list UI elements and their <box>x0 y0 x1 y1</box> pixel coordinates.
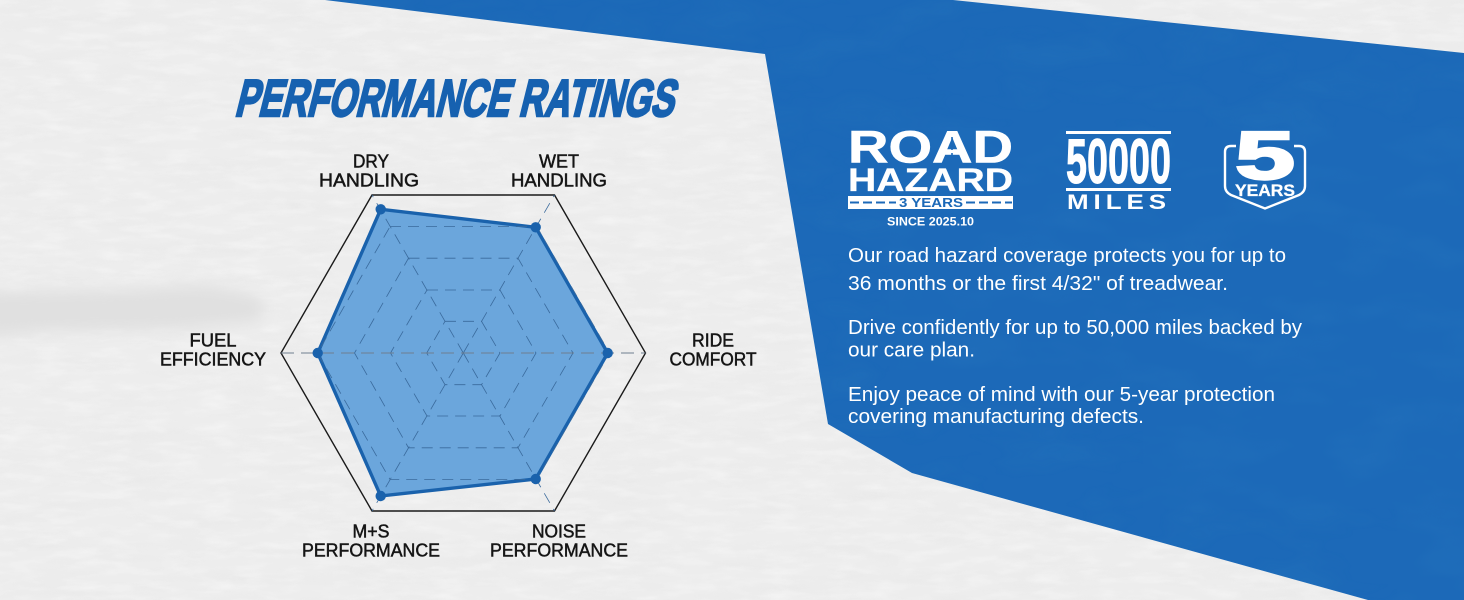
label: m+s performance: M+S <box>352 520 390 542</box>
icon: road hazard badge: HAZARD <box>848 162 1013 198</box>
data points <box>312 204 613 501</box>
label: m+s performance <box>302 520 440 560</box>
icon: 50000 miles badge: 50000 <box>1066 127 1171 197</box>
icon: 50000 miles badge <box>1066 127 1171 214</box>
label: noise performance: PERFORMANCE <box>490 540 628 560</box>
paragraph: road hazard: 36 months or the first 4/32" of treadwear. <box>848 273 1228 295</box>
icon: 5 years shield: YEARS <box>1235 182 1295 200</box>
icon: road hazard badge: 3 YEARS <box>899 195 963 210</box>
data area <box>318 209 608 496</box>
icon: road hazard badge: ROAD <box>848 122 1013 172</box>
label: m+s performance: PERFORMANCE <box>302 540 440 560</box>
icon: 5 years shield <box>1225 118 1305 208</box>
label: dry handling: DRY <box>353 150 389 172</box>
paragraph: five year protection: Enjoy peace of mind with our 5-year protection <box>848 384 1275 406</box>
paragraph: mileage: Drive confidently for up to 50,000 miles backed by <box>848 317 1302 339</box>
label: ride comfort: RIDE <box>692 330 734 350</box>
title: PERFORMANCE RATINGS <box>231 70 685 128</box>
paragraph: mileage <box>848 317 1302 362</box>
paragraph: mileage: our care plan. <box>848 340 975 362</box>
paragraph: road hazard: Our road hazard coverage protects you for up to <box>848 245 1286 267</box>
panel: blue warranty background <box>325 0 1464 600</box>
icon: road hazard badge <box>848 122 1013 228</box>
horizontal axis <box>281 352 646 354</box>
label: dry handling: HANDLING <box>319 170 419 190</box>
label: fuel efficiency: EFFICIENCY <box>160 348 266 370</box>
label: wet handling <box>511 150 607 190</box>
radar chart <box>281 195 646 511</box>
label: noise performance: NOISE <box>532 520 586 542</box>
label: ride comfort <box>670 330 756 370</box>
text block: warranty details <box>848 245 1302 428</box>
paragraph: five year protection <box>848 384 1275 428</box>
label: ride comfort: COMFORT <box>670 348 756 370</box>
label: fuel efficiency: FUEL <box>190 330 236 350</box>
chart outer frame <box>281 195 646 511</box>
dashed grid <box>318 195 610 511</box>
label: wet handling: HANDLING <box>511 170 607 190</box>
axis labels <box>160 150 756 560</box>
icon: 50000 miles badge: MILES <box>1067 191 1171 214</box>
icon: 5 years shield: 5 <box>1235 118 1295 194</box>
icon: road hazard badge: SINCE 2025.10 <box>887 216 974 228</box>
paragraph: road hazard <box>848 245 1286 295</box>
label: noise performance <box>490 520 628 560</box>
paragraph: five year protection: covering manufacturing defects. <box>848 406 1144 428</box>
label: dry handling <box>319 150 419 190</box>
label: fuel efficiency <box>160 330 266 370</box>
label: wet handling: WET <box>539 150 579 172</box>
